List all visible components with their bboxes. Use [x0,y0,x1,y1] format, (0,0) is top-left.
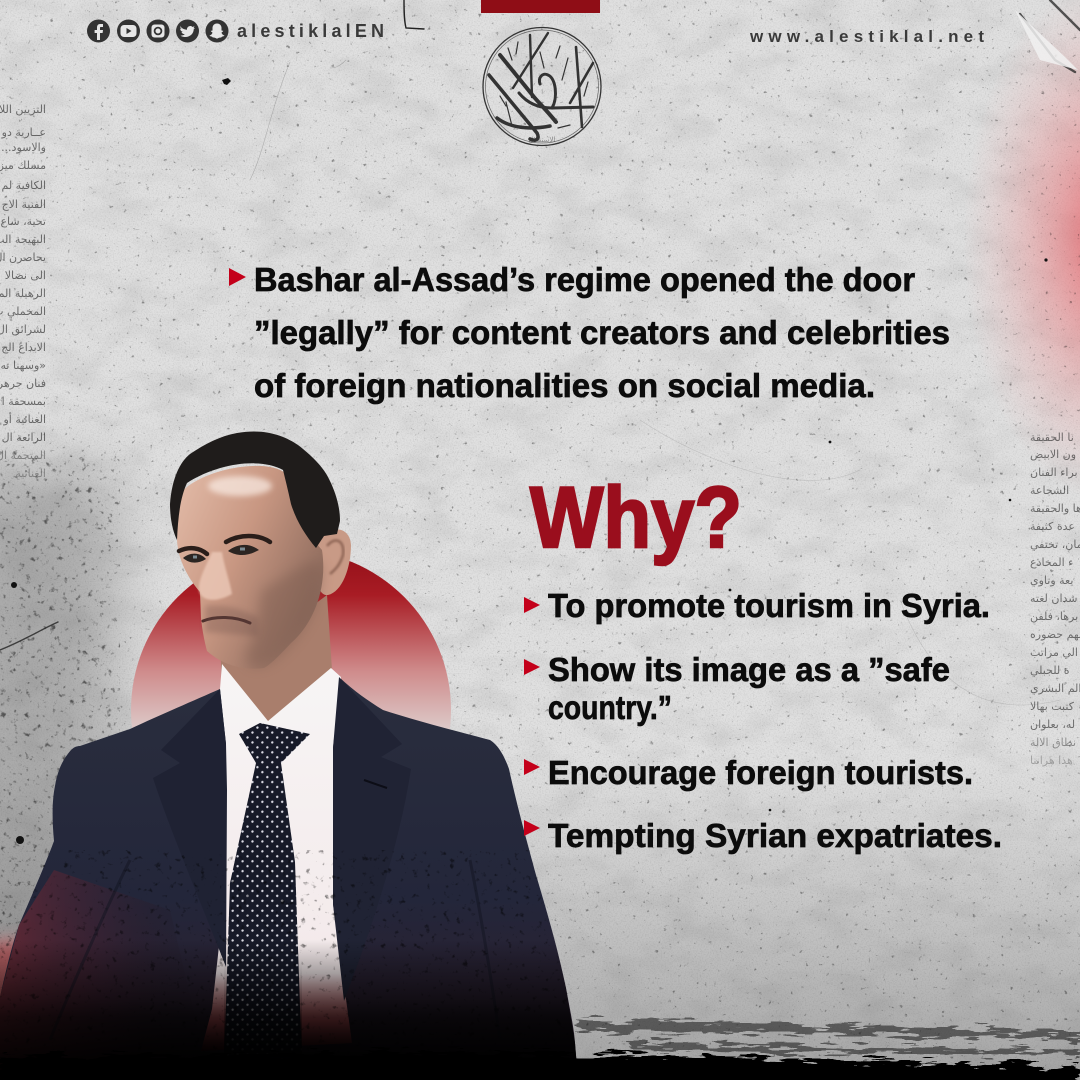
shirt [201,664,352,1051]
reason 2 [524,651,950,726]
newspaper column right: برها، فلفن [1030,610,1078,623]
newspaper column right [1030,431,1080,767]
handle: alestiklalEN [237,21,384,41]
statement text [254,261,950,404]
main statement [229,261,950,404]
statement text: Bashar al-Assad’s regime opened the door [254,261,915,298]
hair [170,431,340,548]
reason 2: country.” [548,689,672,726]
newspaper column right: شدان لغته [1030,592,1078,605]
newspaper column left: التزيين اللا [0,103,46,116]
newspaper column left: الرائعة ال [2,431,46,444]
newspaper column left: بمسحقة ا [2,395,46,408]
nose [199,552,232,600]
newspaper column left: عــارية دو [1,126,46,139]
newspaper column right: نا الحقيقة [1030,431,1074,444]
newspaper column right: ون الابيض [1030,448,1076,461]
newspaper column left [0,103,46,480]
newspaper column left: والاسود... [1,141,46,154]
newspaper column left: تحية، شاع [0,215,46,228]
suit jacket [0,677,578,1080]
newspaper column right: ء المخادع [1030,556,1073,569]
forehead highlight [208,476,272,496]
face [176,466,323,669]
newspaper column left: مسلك ميز [0,159,46,172]
reason 2: Show its image as a ”safe [548,651,950,688]
ear [317,530,351,595]
lower fade on figure [0,940,578,1080]
neck [220,595,332,722]
newspaper column left: الغنائية أو [2,412,46,426]
newspaper column right: له، بعلوان [1030,718,1075,731]
mouth [203,617,250,623]
tie [224,723,310,1064]
statement text: ”legally” for content creators and celebrities [254,314,950,351]
lapels [153,689,227,967]
why heading: Why? [530,470,742,566]
newspaper column right: براء الفنان [1030,466,1078,479]
newspaper column left: الابداع الج [1,341,46,354]
bottom grunge band [0,1018,1080,1080]
portrait backdrop: red disc [131,550,451,870]
newspaper column left: الفنية الاج [2,198,46,211]
website: www.alestiklal.net [749,27,984,46]
newspaper column right: ة للجبلي [1030,664,1069,677]
newspaper column right: الشجاعة [1030,484,1069,497]
reason 4: Tempting Syrian expatriates. [548,817,1002,854]
eyebrows [179,536,270,554]
newspaper column left: الغنائية [15,467,46,480]
grime on lower suit [0,850,564,1036]
reason 1: To promote tourism in Syria. [548,587,990,624]
newspaper column right: هذا هراننا [1030,754,1073,767]
social media icons [87,20,228,42]
bullet triangle [229,268,246,286]
statement text: of foreign nationalities on social media. [254,367,875,404]
logo: calligraphy roundel [483,28,601,146]
newspaper column left: الكافية لم [2,179,46,192]
newspaper column right: الي مراتب [1030,646,1078,659]
newspaper column right: نطاق الالة [1030,736,1076,749]
portrait: man in dark suit [0,431,580,1080]
cheek and jaw shading [246,562,322,667]
eyes [183,545,259,563]
newspaper column right: عدة كثيفة [1030,520,1075,533]
newspaper column right: كتبت بهالا [1030,700,1075,713]
reason 3: Encourage foreign tourists. [548,754,973,791]
logo: calligraphy roundel: الاستقلال [529,136,555,144]
newspaper column right: الم البشري [1030,682,1080,695]
top red bar [481,0,600,13]
reasons list [524,587,1002,854]
newspaper column right: يعة وتاوي [1030,574,1073,587]
newspaper column left: «وسهنا ته [1,359,46,372]
newspaper column left: الى نضالا [5,269,46,282]
